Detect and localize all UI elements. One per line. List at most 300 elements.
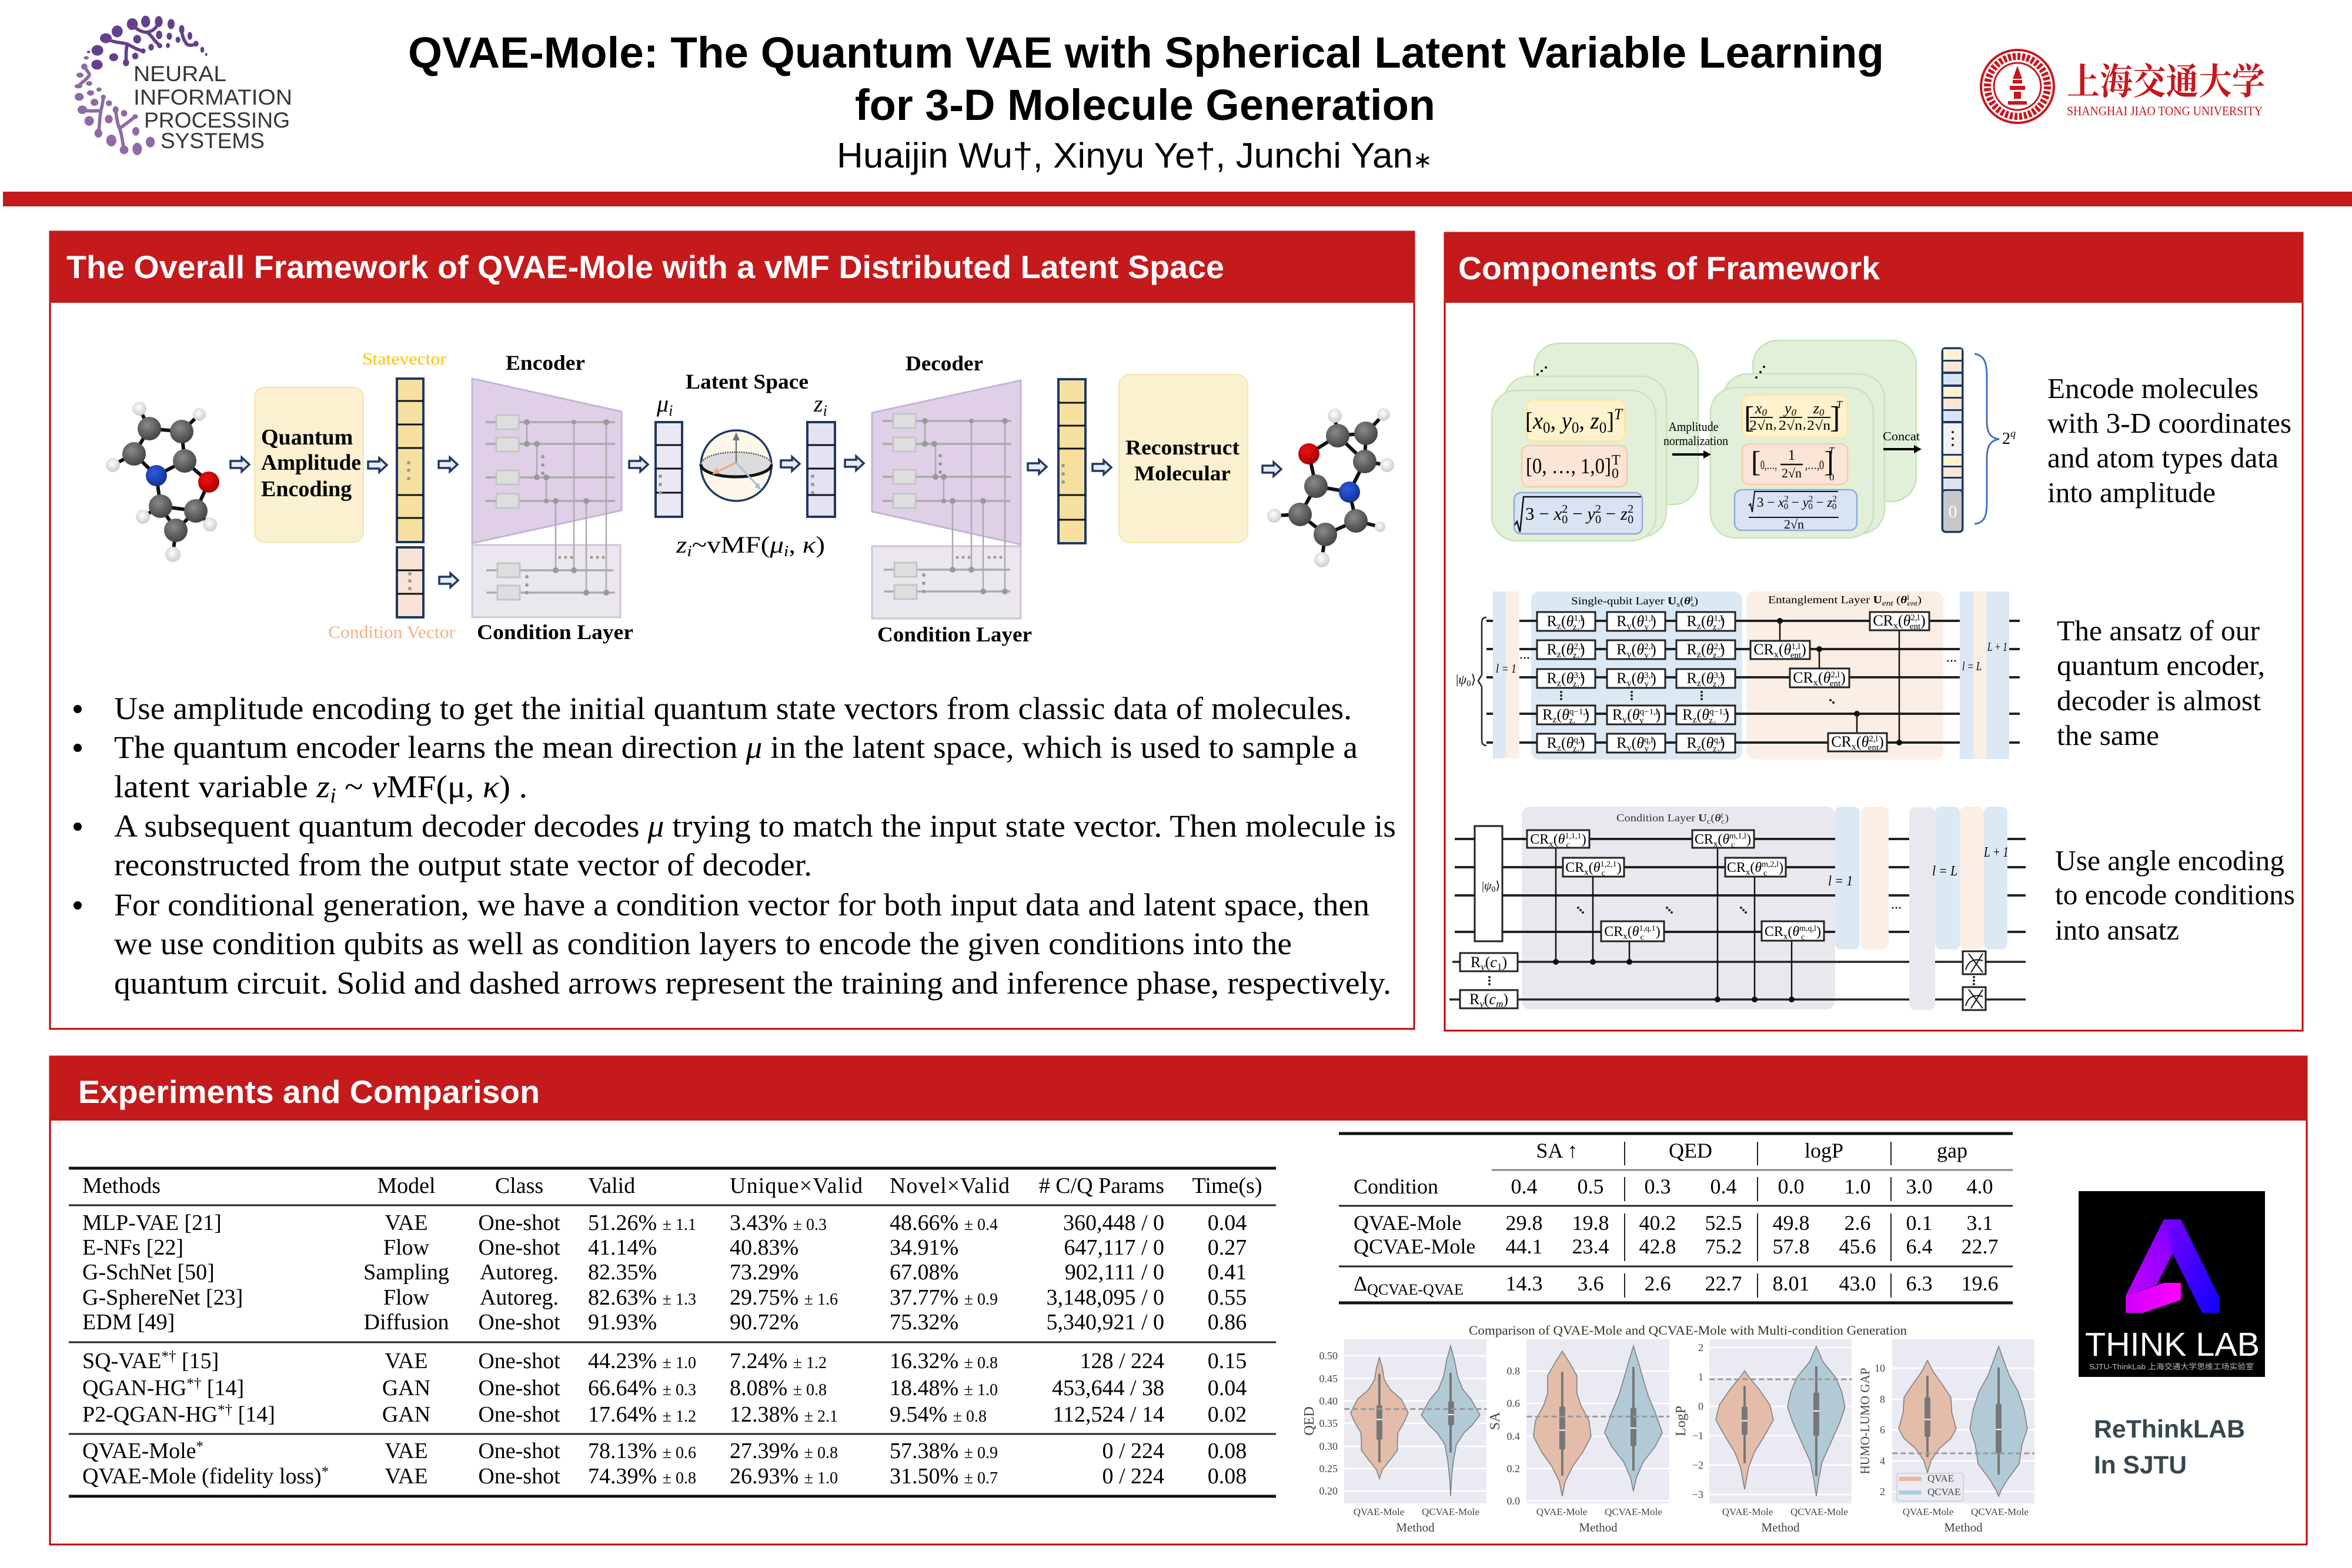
panel: experiments and comparison — [49, 1056, 2307, 1544]
formula: vMF sampling: z — [676, 531, 687, 558]
logo: Shanghai Jiao Tong University — [1981, 50, 2265, 123]
brace: 2^q: 2 — [2002, 430, 2010, 448]
table rows: quantum methods: GAN — [382, 1376, 430, 1400]
table 2 condition row — [1354, 1175, 1993, 1198]
gate labels: entanglement layer: θ — [1784, 641, 1792, 658]
table rows: quantum methods: 0.04 — [1208, 1376, 1247, 1400]
diagram: raw data cards: T — [1614, 406, 1623, 423]
gate labels: single-qubit layer: y — [1645, 623, 1649, 632]
table rows: classical methods: 51.26% ± 1.1 — [588, 1211, 696, 1235]
text: ReThinkLAB In SJTU: ReThinkLAB — [2094, 1415, 2245, 1443]
diagram: ansatz circuit: l = L — [1962, 659, 1982, 673]
diagram: raw data cards: , — [1579, 407, 1591, 434]
diagram: normalized data cards: − — [1813, 495, 1827, 510]
table 2 QCVAE-Mole row: QCVAE-Mole — [1354, 1235, 1475, 1258]
diagram: normalized data cards: 2 — [1809, 494, 1813, 504]
chart: HOMO-LUMO gap violin: 4 — [1880, 1455, 1885, 1467]
table 2 delta row: QCVAE-QVAE — [1367, 1281, 1464, 1298]
gate labels: condition layer: θ — [1755, 860, 1762, 875]
diagram: condition layer circuit: ) — [1725, 812, 1729, 824]
chart: HOMO-LUMO gap violin: QVAE-Mole — [1903, 1506, 1953, 1517]
table rows: QVAE-Mole: QVAE-Mole (fidelity loss) — [82, 1464, 322, 1489]
gate labels: entanglement layer: x — [1893, 621, 1898, 631]
icon: input molecule — [106, 402, 219, 562]
gate labels: single-qubit layer: z₁ — [1573, 651, 1580, 660]
arrows: framework flow — [230, 456, 1281, 587]
table 2 delta row: 3.6 — [1577, 1272, 1604, 1295]
gate labels: entanglement layer: ) — [1879, 733, 1884, 750]
gate labels: single-qubit layer: θ — [1636, 670, 1644, 687]
gate labels: condition layer: c — [1763, 869, 1767, 878]
chart: SA violin — [1488, 1339, 1669, 1534]
table rows: classical methods: 0.55 — [1208, 1285, 1247, 1310]
diagram: condition layer circuit: 0 — [1491, 885, 1495, 894]
gate labels: single-qubit layer: ) — [1651, 670, 1656, 687]
table 2 QVAE-Mole row: 19.8 — [1572, 1211, 1609, 1235]
logo: ThinkLab — [2079, 1191, 2265, 1377]
diagram: ansatz circuit: 0 — [1466, 679, 1471, 688]
gate labels: single-qubit layer: θ — [1562, 706, 1569, 723]
gate labels: single-qubit layer: θ — [1702, 706, 1709, 723]
table rows: classical methods: 82.35% — [588, 1260, 657, 1285]
chart: QED violin: 0.45 — [1319, 1373, 1338, 1385]
gate labels: single-qubit layer: ( — [1632, 641, 1636, 658]
diagram: raw data cards: 0 — [1562, 513, 1568, 526]
table rows: classical methods: 67.08% — [890, 1260, 958, 1285]
gate labels: condition layer: CR — [1604, 924, 1623, 940]
gate labels: condition layer: θ — [1722, 832, 1729, 847]
table 2 delta row: 19.6 — [1962, 1272, 1998, 1295]
table rows: QVAE-Mole: VAE — [385, 1439, 428, 1463]
title — [408, 28, 1884, 129]
text: angle encoding description — [2055, 844, 2295, 946]
table rows: classical methods: E-NFs [22] — [82, 1235, 183, 1260]
gate labels: single-qubit layer: ( — [1632, 613, 1636, 630]
amplitude vector column — [1942, 348, 1963, 532]
table rows: classical methods: Sampling — [363, 1260, 449, 1285]
gate labels: single-qubit layer: ( — [1632, 734, 1636, 751]
box: reconstruct molecular: Reconstruct — [1125, 436, 1240, 459]
table rows: classical methods: Flow — [383, 1235, 430, 1260]
table header: Class — [495, 1174, 543, 1198]
text: framework bullets: For conditional generation, we have a condition vector for both input data and latent space, then — [114, 887, 1369, 922]
text: encode molecules — [2047, 372, 2291, 509]
text: encode molecules: and atom types data — [2047, 442, 2278, 474]
table rows: quantum methods: *† — [218, 1402, 232, 1418]
diagram: normalized data cards: 1 — [1788, 447, 1795, 463]
diagram: normalized data cards — [1710, 340, 1916, 538]
box: reconstruct molecular — [1119, 375, 1248, 543]
table rows: classical methods: One-shot — [478, 1211, 560, 1235]
gate labels: condition layer: c — [1641, 933, 1644, 942]
gate labels: entanglement layer: ) — [1920, 612, 1926, 629]
gate labels: condition layer: CR — [1530, 832, 1549, 847]
table 2 delta row — [1354, 1272, 1998, 1298]
table rows: quantum methods: One-shot — [478, 1376, 560, 1400]
table 2 condition row: 0.4 — [1710, 1175, 1737, 1198]
chart: HOMO-LUMO gap violin: 6 — [1880, 1424, 1885, 1436]
gate labels: single-qubit layer: ( — [1627, 706, 1632, 723]
gate labels: single-qubit layer: ) — [1656, 706, 1661, 723]
diagram: ansatz circuit: ⟩ — [1471, 672, 1476, 687]
chart: LogP violin: QCVAE-Mole — [1790, 1506, 1848, 1517]
gate labels: condition layer: ) — [1617, 860, 1622, 875]
table rows: quantum methods: 17.64% ± 1.2 — [588, 1402, 696, 1427]
gate labels: single-qubit layer: y — [1639, 716, 1644, 726]
chart: SA violin: 0.8 — [1506, 1365, 1520, 1377]
table rows: classical methods: 0.41 — [1208, 1260, 1247, 1285]
gate labels: condition layer: ( — [1485, 954, 1490, 971]
gate labels: single-qubit layer: ( — [1697, 706, 1702, 723]
chart: QED violin: 0.35 — [1319, 1417, 1338, 1429]
gate labels: single-qubit layer: ) — [1720, 613, 1725, 630]
table 2 delta row: 8.01 — [1772, 1272, 1810, 1295]
gate labels: condition layer: c — [1489, 991, 1496, 1008]
gate labels: entanglement layer: CR — [1831, 733, 1852, 750]
diagram: raw data cards — [1492, 343, 1698, 541]
table rows: classical methods: 0.86 — [1208, 1310, 1247, 1335]
chart: LogP violin: Method — [1761, 1520, 1800, 1534]
gate labels: single-qubit layer: θ — [1566, 641, 1574, 658]
table rows: quantum methods: 112,524 / 14 — [1053, 1402, 1164, 1427]
table 2 QCVAE-Mole row: 75.2 — [1705, 1235, 1742, 1258]
diagram: condition layer circuit: l = L — [1932, 864, 1957, 879]
chart: LogP violin: −2 — [1692, 1459, 1703, 1471]
gate labels: entanglement layer: x — [1813, 678, 1818, 688]
gate labels: single-qubit layer: ) — [1651, 613, 1656, 630]
diagram: normalized data cards: 0,…, — [1760, 457, 1777, 472]
table rows: classical methods: 3.43% ± 0.3 — [730, 1211, 827, 1235]
formula: vMF sampling: i — [784, 543, 789, 560]
gate labels: single-qubit layer: y — [1645, 744, 1649, 754]
gate labels: single-qubit layer: z — [1552, 715, 1557, 725]
table rows: quantum methods: P2-QGAN-HG — [82, 1402, 218, 1427]
table rows: QVAE-Mole: QVAE-Mole — [82, 1439, 196, 1463]
gate labels: entanglement layer: ( — [1856, 733, 1862, 750]
table rows: quantum methods — [82, 1349, 1247, 1427]
gate labels: single-qubit layer: 2,l — [1713, 642, 1723, 651]
gate labels: entanglement layer: CR — [1793, 669, 1813, 686]
gate labels: single-qubit layer: z — [1697, 743, 1701, 753]
logo: NeurIPS: INFORMATION — [133, 85, 292, 109]
table 2 QCVAE-Mole row: 22.7 — [1962, 1235, 1998, 1258]
diagram: ansatz circuit: l — [1690, 594, 1693, 603]
table rows: quantum methods: *† — [186, 1376, 201, 1392]
table 2 QCVAE-Mole row: 23.4 — [1572, 1235, 1609, 1258]
diagram: ansatz circuit: ( — [1893, 594, 1900, 606]
gate labels: single-qubit layer: R — [1682, 706, 1692, 723]
diagram: ansatz circuit: ) — [1917, 594, 1922, 606]
diagram: condition layer circuit: |ψ — [1482, 880, 1491, 892]
gate labels: single-qubit layer: ) — [1651, 734, 1656, 751]
chart: QED violin: 0.40 — [1319, 1395, 1338, 1407]
gate labels: single-qubit layer: θ — [1566, 734, 1574, 751]
label: mu_i: μ — [657, 390, 669, 417]
table 2 QCVAE-Mole row — [1354, 1235, 1998, 1258]
gate labels: single-qubit layer: ( — [1561, 670, 1566, 687]
gate labels: entanglement layer: ent — [1910, 622, 1921, 631]
table 2 QVAE-Mole row: 29.8 — [1505, 1211, 1543, 1235]
gate labels: condition layer: CR — [1695, 832, 1713, 847]
table rows: quantum methods: 8.08% ± 0.8 — [730, 1376, 827, 1400]
table 2 QVAE-Mole row — [1354, 1211, 1993, 1235]
diagram: raw data cards: − — [1601, 503, 1621, 524]
table rows: classical methods: 34.91% — [890, 1235, 958, 1260]
statevector column — [397, 379, 423, 542]
diagram: normalized data cards: ] — [1830, 401, 1840, 434]
gate labels: single-qubit layer: R — [1616, 613, 1627, 630]
chart: LogP violin — [1673, 1339, 1852, 1534]
gate labels: single-qubit layer: ) — [1720, 670, 1725, 687]
gate labels: single-qubit layer: θ — [1706, 613, 1714, 630]
label: latent space: Latent Space — [686, 370, 808, 393]
table 2 condition row: 0.3 — [1644, 1175, 1671, 1198]
gate labels: single-qubit layer: 2,l — [1644, 642, 1653, 651]
diagram: raw data cards: 2 — [1628, 503, 1633, 516]
table rows: classical methods: 41.14% — [588, 1235, 657, 1260]
label: decoder: Decoder — [906, 352, 983, 375]
logo: Shanghai Jiao Tong University: SHANGHAI JIAO TONG UNIVERSITY — [2067, 103, 2263, 118]
diagram: normalized data cards: z — [1826, 495, 1832, 510]
text: framework bullets: Use amplitude encoding to get the initial quantum state vectors from classic data of molecules. — [114, 691, 1352, 726]
gate labels: single-qubit layer: R — [1687, 734, 1697, 751]
table rows: QVAE-Mole: 57.38% ± 0.9 — [890, 1439, 998, 1463]
chart: QED violin: QED — [1302, 1406, 1317, 1436]
gate labels: condition layer: c — [1602, 869, 1605, 878]
table header: Methods — [82, 1174, 161, 1198]
gate labels: entanglement layer: θ — [1903, 612, 1911, 629]
diagram: raw data cards: 0 — [1599, 419, 1606, 436]
gate labels: single-qubit layer: y — [1627, 743, 1632, 753]
table rows: QVAE-Mole: 0.08 — [1208, 1464, 1247, 1489]
diagram: ansatz circuit: ··· — [1946, 655, 1957, 667]
label: amplitude normalization: Amplitude — [1669, 419, 1718, 434]
table 2 header: SA ↑ — [1536, 1139, 1578, 1162]
table rows: quantum methods: [15] — [176, 1349, 219, 1373]
chart: LogP violin: −1 — [1692, 1430, 1703, 1442]
gate labels: single-qubit layer: R — [1616, 670, 1627, 687]
heading: experiments: Experiments and Comparison — [78, 1074, 540, 1110]
table 2 header — [1536, 1139, 1967, 1162]
chart: SA violin: 0.0 — [1506, 1495, 1520, 1507]
gate labels: condition layer: ( — [1589, 860, 1593, 875]
label: mu_i: i — [669, 402, 673, 419]
gate labels: single-qubit layer: y — [1627, 650, 1632, 660]
table rows: quantum methods: 66.64% ± 0.3 — [588, 1376, 696, 1400]
text: encode molecules: with 3-D coordinates — [2047, 407, 2291, 439]
table 2 delta row: 22.7 — [1705, 1272, 1742, 1295]
gate labels: single-qubit layer: θ — [1636, 734, 1644, 751]
table rows: quantum methods: 18.48% ± 1.0 — [890, 1376, 998, 1400]
gate labels: entanglement layer: 2,l — [1869, 734, 1878, 744]
gate labels: condition layer: c — [1801, 933, 1805, 942]
table rows: quantum methods: 16.32% ± 0.8 — [890, 1349, 998, 1373]
table rows: QVAE-Mole: 27.39% ± 0.8 — [730, 1439, 838, 1463]
diagram: raw data cards: 0 — [1543, 419, 1550, 436]
table rows: classical methods: 73.29% — [730, 1260, 799, 1285]
table header: Time(s) — [1192, 1174, 1262, 1198]
gate labels: single-qubit layer: R — [1547, 641, 1557, 658]
table rows: QVAE-Mole: 0 / 224 — [1102, 1464, 1164, 1489]
diagram: normalized data cards: , — [1773, 417, 1777, 432]
gate labels: condition layer: ) — [1582, 832, 1586, 847]
logo: Shanghai Jiao Tong University: 上海交通大学 — [2067, 52, 2265, 105]
chart: HOMO-LUMO gap violin: 10 — [1875, 1362, 1885, 1374]
text: angle encoding description: Use angle encoding — [2055, 844, 2284, 877]
text: framework bullets: we use condition qubits as well as condition layers to encode the given conditions into the — [114, 926, 1292, 961]
text: framework bullets — [74, 691, 1396, 1001]
gate labels: single-qubit layer: y — [1645, 651, 1649, 660]
diagram: raw data cards: z — [1590, 407, 1599, 434]
table rows: quantum methods: *† — [161, 1349, 176, 1365]
gate labels: condition layer: x — [1746, 868, 1750, 877]
gate labels: single-qubit layer: z₁ — [1569, 716, 1576, 726]
diagram: ansatz circuit: ent — [1882, 599, 1893, 607]
gate labels: single-qubit layer: R — [1687, 613, 1697, 630]
gate labels: single-qubit layer: ( — [1561, 641, 1566, 658]
chart: LogP violin: 0 — [1698, 1400, 1703, 1412]
gate labels: entanglement layer: ) — [1840, 669, 1846, 686]
authors: Huaijin Wu†, Xinyu Ye†, Junchi Yan ∗ — [837, 136, 1432, 175]
table 2 QVAE-Mole row: 52.5 — [1705, 1211, 1742, 1235]
diagram: normalized data cards: T — [1836, 399, 1843, 410]
title: QVAE-Mole: The Quantum VAE with Spherical Latent Variable Learning — [408, 28, 1884, 77]
text: angle encoding description: into ansatz — [2055, 914, 2179, 946]
table rows: classical methods: EDM [49] — [82, 1310, 175, 1335]
diagram: condition layer circuit: Condition Layer U — [1616, 812, 1706, 824]
gate labels: single-qubit layer: q,l — [1713, 735, 1723, 745]
gate labels: condition layer: CR — [1765, 924, 1783, 940]
gate labels: single-qubit layer: ) — [1724, 706, 1729, 723]
gate labels: entanglement layer: 1,l — [1791, 642, 1800, 651]
gate labels: condition layer: ) — [1503, 991, 1508, 1008]
chart: QED violin: 0.20 — [1319, 1485, 1338, 1497]
table 2 QVAE-Mole row: 2.6 — [1844, 1211, 1871, 1235]
diagram: ansatz circuit: ··· — [1519, 652, 1530, 664]
gate labels: single-qubit layer: 3,l — [1713, 671, 1723, 680]
gate labels: condition layer — [1469, 832, 1821, 1009]
icon: vMF sphere — [701, 430, 771, 501]
gate labels: single-qubit layer: ( — [1701, 734, 1706, 751]
diagram: raw data cards: [x — [1525, 407, 1544, 434]
chart: HOMO-LUMO gap violin: 2 — [1880, 1486, 1885, 1497]
table rows: QVAE-Mole: 26.93% ± 1.0 — [730, 1464, 838, 1489]
gate labels: single-qubit layer: θ — [1636, 641, 1644, 658]
table rows: classical methods: 3,148,095 / 0 — [1046, 1285, 1164, 1310]
gate labels: condition layer: ( — [1718, 832, 1722, 847]
text: framework bullets: i — [330, 784, 336, 807]
diagram: normalized data cards: ] — [1824, 445, 1834, 478]
diagram: raw data cards: z — [1620, 503, 1628, 524]
gate labels: condition layer: c — [1731, 841, 1735, 850]
gate labels: condition layer: ) — [1779, 860, 1783, 875]
gate labels: single-qubit layer: R — [1687, 641, 1697, 658]
diagram: ansatz circuit: Entanglement Layer U — [1768, 594, 1881, 606]
gate labels: single-qubit layer: ( — [1701, 641, 1706, 658]
table 2 delta row: 6.3 — [1906, 1272, 1932, 1295]
legend: QVAE / QCVAE: QVAE — [1927, 1473, 1954, 1484]
logo: ThinkLab: THINK LAB — [2085, 1326, 2260, 1363]
heading: components: Components of Framework — [1458, 250, 1880, 286]
table 2 QCVAE-Mole row: 42.8 — [1639, 1235, 1676, 1258]
diagram: condition layer circuit: l = 1 — [1828, 874, 1853, 889]
gate labels: single-qubit layer: z — [1697, 678, 1701, 688]
table rows: classical methods: 0.04 — [1208, 1211, 1247, 1235]
gate labels: single-qubit layer: z₂ — [1713, 651, 1720, 660]
logo: NeurIPS: NEURAL — [133, 62, 226, 86]
table rows: quantum methods: 0.02 — [1208, 1402, 1247, 1427]
chart: SA violin: QVAE-Mole — [1536, 1506, 1587, 1517]
diagram: condition layer circuit: L + 1 — [1983, 845, 2009, 860]
diagram: normalized data cards: 0 — [1792, 407, 1797, 418]
label: condition vector: Condition Vector — [328, 623, 455, 642]
diagram: ansatz circuit — [1456, 591, 2020, 760]
gate labels: single-qubit layer: ) — [1580, 641, 1585, 658]
logo: ThinkLab: SJTU-ThinkLab 上海交通大学思维工场实验室 — [2089, 1362, 2254, 1371]
diagram: raw data cards: y — [1559, 407, 1572, 434]
gate labels: single-qubit layer: ( — [1632, 670, 1636, 687]
gate labels: condition layer: 1,1,1 — [1565, 832, 1582, 841]
label: concat arrow — [1883, 429, 1922, 453]
gate labels: single-qubit layer: ( — [1557, 706, 1562, 723]
gate labels: single-qubit layer: θ — [1706, 734, 1714, 751]
table rows: QVAE-Mole: 31.50% ± 0.7 — [890, 1464, 998, 1489]
output statevector column — [1058, 379, 1085, 543]
table rows: quantum methods: 9.54% ± 0.8 — [890, 1402, 987, 1427]
chart: QED violin — [1302, 1339, 1486, 1534]
text: ansatz description — [2057, 614, 2265, 751]
brace: 2^q: q — [2010, 427, 2016, 439]
gate labels: single-qubit layer: R — [1542, 706, 1552, 723]
gate labels: single-qubit layer: ( — [1701, 613, 1706, 630]
table 2 header: QED — [1669, 1139, 1712, 1162]
table 2 QVAE-Mole row: QVAE-Mole — [1354, 1211, 1461, 1235]
table rows: classical methods: 40.83% — [730, 1235, 799, 1260]
table rows: QVAE-Mole: 0 / 224 — [1102, 1439, 1164, 1463]
gate labels: entanglement layer: x — [1774, 650, 1779, 660]
gate labels: condition layer: ( — [1750, 860, 1755, 875]
table rows: quantum methods: VAE — [385, 1349, 428, 1373]
gate labels: single-qubit layer: y — [1627, 621, 1632, 631]
gate labels: entanglement layer: ent — [1790, 651, 1802, 660]
table rows: quantum methods: [14] — [201, 1376, 244, 1400]
chart: HOMO-LUMO gap violin: 8 — [1880, 1393, 1885, 1405]
gate labels: condition layer: m — [1496, 998, 1503, 1009]
table rows: classical methods: G-SchNet [50] — [82, 1260, 215, 1285]
diagram: condition layer circuit: l — [1721, 811, 1723, 820]
diagram: condition layer circuit: θ — [1715, 812, 1722, 824]
diagram: normalized data cards: 2√n — [1779, 418, 1803, 433]
chart: LogP violin: −3 — [1692, 1489, 1703, 1500]
diagram: raw data cards: 3 − x — [1525, 503, 1562, 524]
gate labels: single-qubit layer: q,l — [1644, 735, 1653, 745]
gate labels: condition layer: y — [1478, 998, 1484, 1009]
gate labels: single-qubit layer: z₁ — [1573, 744, 1580, 754]
heading: components — [1444, 232, 2303, 303]
gate labels: condition layer: ( — [1788, 924, 1792, 940]
gate labels: single-qubit layer: 2,l — [1573, 642, 1583, 651]
table rows: classical methods: 360,448 / 0 — [1063, 1211, 1164, 1235]
table 2 condition row: Condition — [1354, 1175, 1438, 1198]
table rows: QVAE-Mole: * — [322, 1464, 329, 1480]
gate labels: condition layer: x — [1623, 932, 1628, 941]
table header: Valid — [588, 1174, 635, 1198]
diagram: normalized data cards: z — [1813, 400, 1819, 417]
gate labels: single-qubit layer: z — [1697, 621, 1701, 631]
text: framework bullets: The quantum encoder learns the mean direction μ in the latent space, which is used to sample a — [114, 730, 1358, 765]
diagram: ansatz circuit: ent — [1907, 599, 1918, 607]
gate labels: entanglement layer — [1753, 612, 1926, 753]
